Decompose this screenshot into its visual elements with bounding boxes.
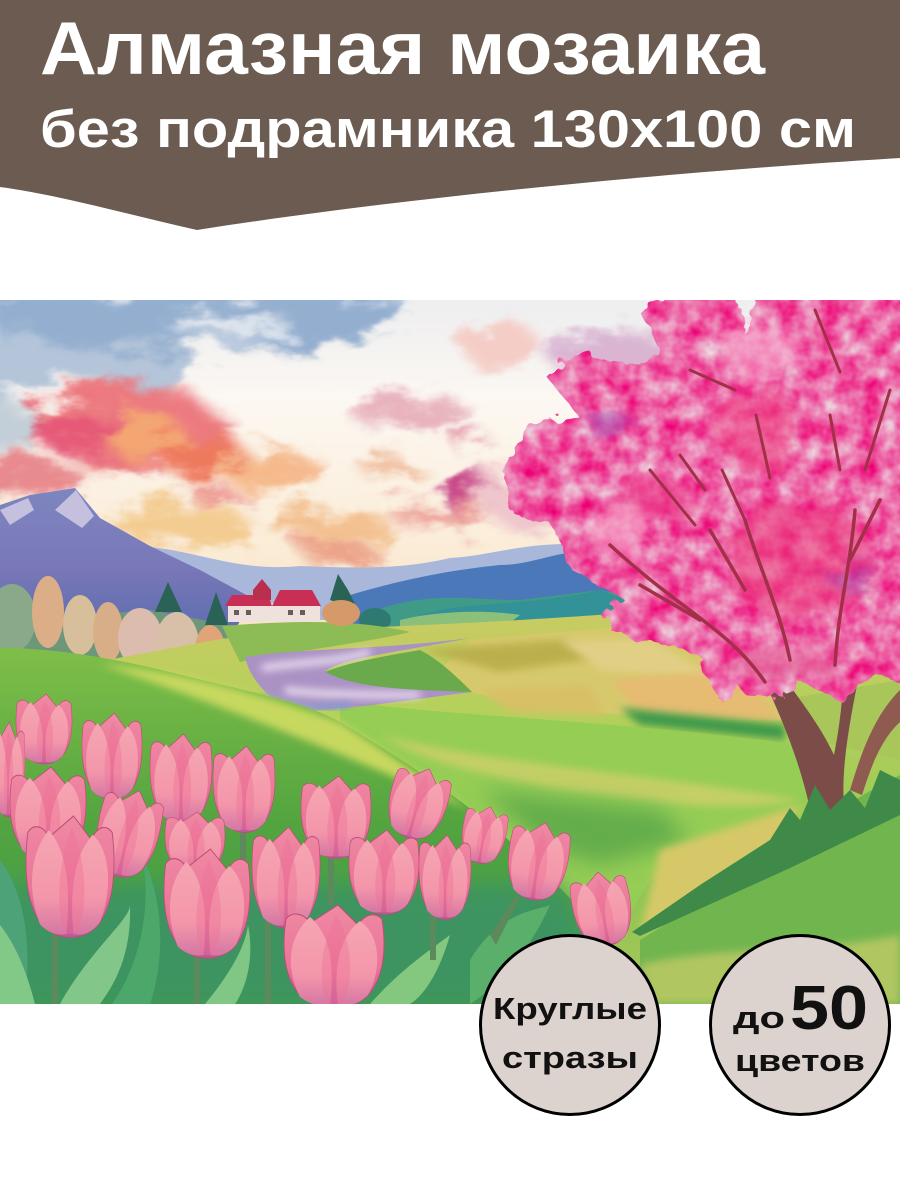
- mountains: [0, 488, 626, 627]
- badge: round rhinestones: Круглые: [493, 991, 647, 1026]
- grass tuft: [632, 770, 900, 936]
- tree trunk: [771, 686, 900, 810]
- tulip leaves and stems: [0, 832, 550, 1004]
- badge: round rhinestones: стразы: [502, 1040, 638, 1075]
- title: Алмазная мозаика: [40, 6, 766, 90]
- icon: farmhouse: [225, 579, 360, 626]
- blossom shading: [586, 326, 876, 685]
- foreground green hill: [0, 648, 640, 1004]
- badge: up to 50 colours: [710, 936, 890, 1114]
- river: [245, 638, 472, 710]
- badge: up to 50 colours: цветов: [735, 1043, 865, 1078]
- distant trees: [0, 574, 391, 660]
- meadow: [111, 614, 900, 1004]
- badge: up to 50 colours: до: [733, 1000, 785, 1035]
- banner background: [0, 0, 900, 230]
- painting: spring landscape: [0, 280, 900, 1008]
- sky: [0, 300, 756, 625]
- badge: round rhinestones: [480, 936, 660, 1114]
- tree branches: [610, 310, 890, 682]
- subtitle: без подрамника 130х100 см: [40, 100, 856, 159]
- tulip field: [0, 694, 637, 1008]
- tree crown: pink blossom: [503, 280, 900, 705]
- badge: up to 50 colours: 50: [790, 974, 868, 1043]
